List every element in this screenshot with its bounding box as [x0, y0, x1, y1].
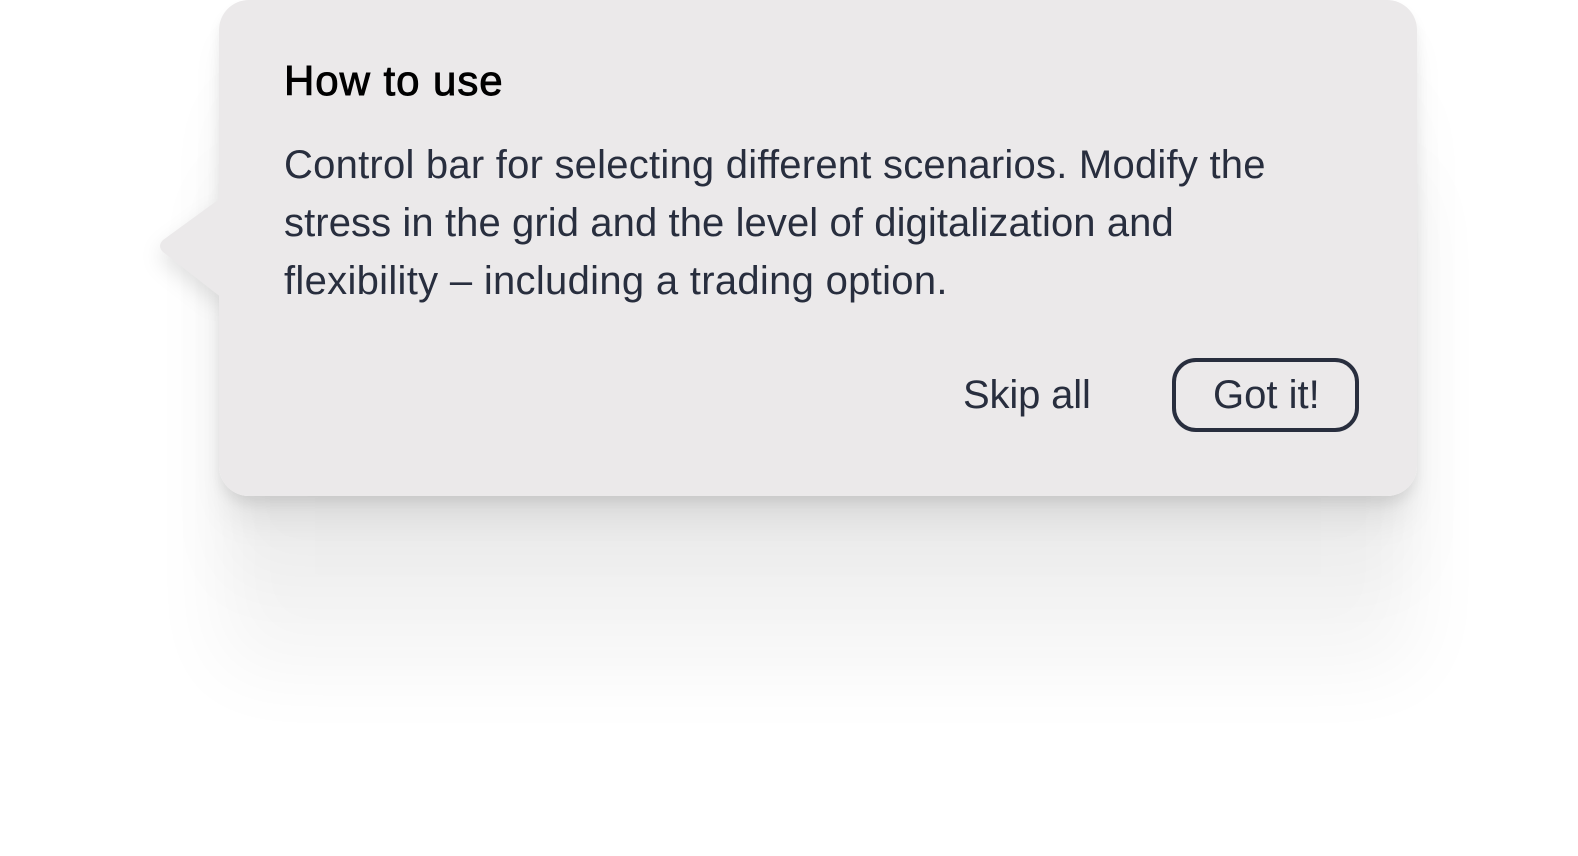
panel: how to use: [219, 0, 1417, 496]
skip all button: Skip all: [963, 373, 1091, 417]
body text line 2: stress in the grid and the level of digitalization and: [284, 201, 1174, 245]
got it button: [1172, 358, 1359, 432]
got it label: Got it!: [1213, 373, 1320, 417]
tooltip pointer: [160, 203, 219, 302]
heading: How to use: [284, 57, 504, 104]
body text line 1: Control bar for selecting different scenarios. Modify the: [284, 143, 1266, 187]
body text line 3: flexibility – including a trading option.: [284, 259, 948, 303]
